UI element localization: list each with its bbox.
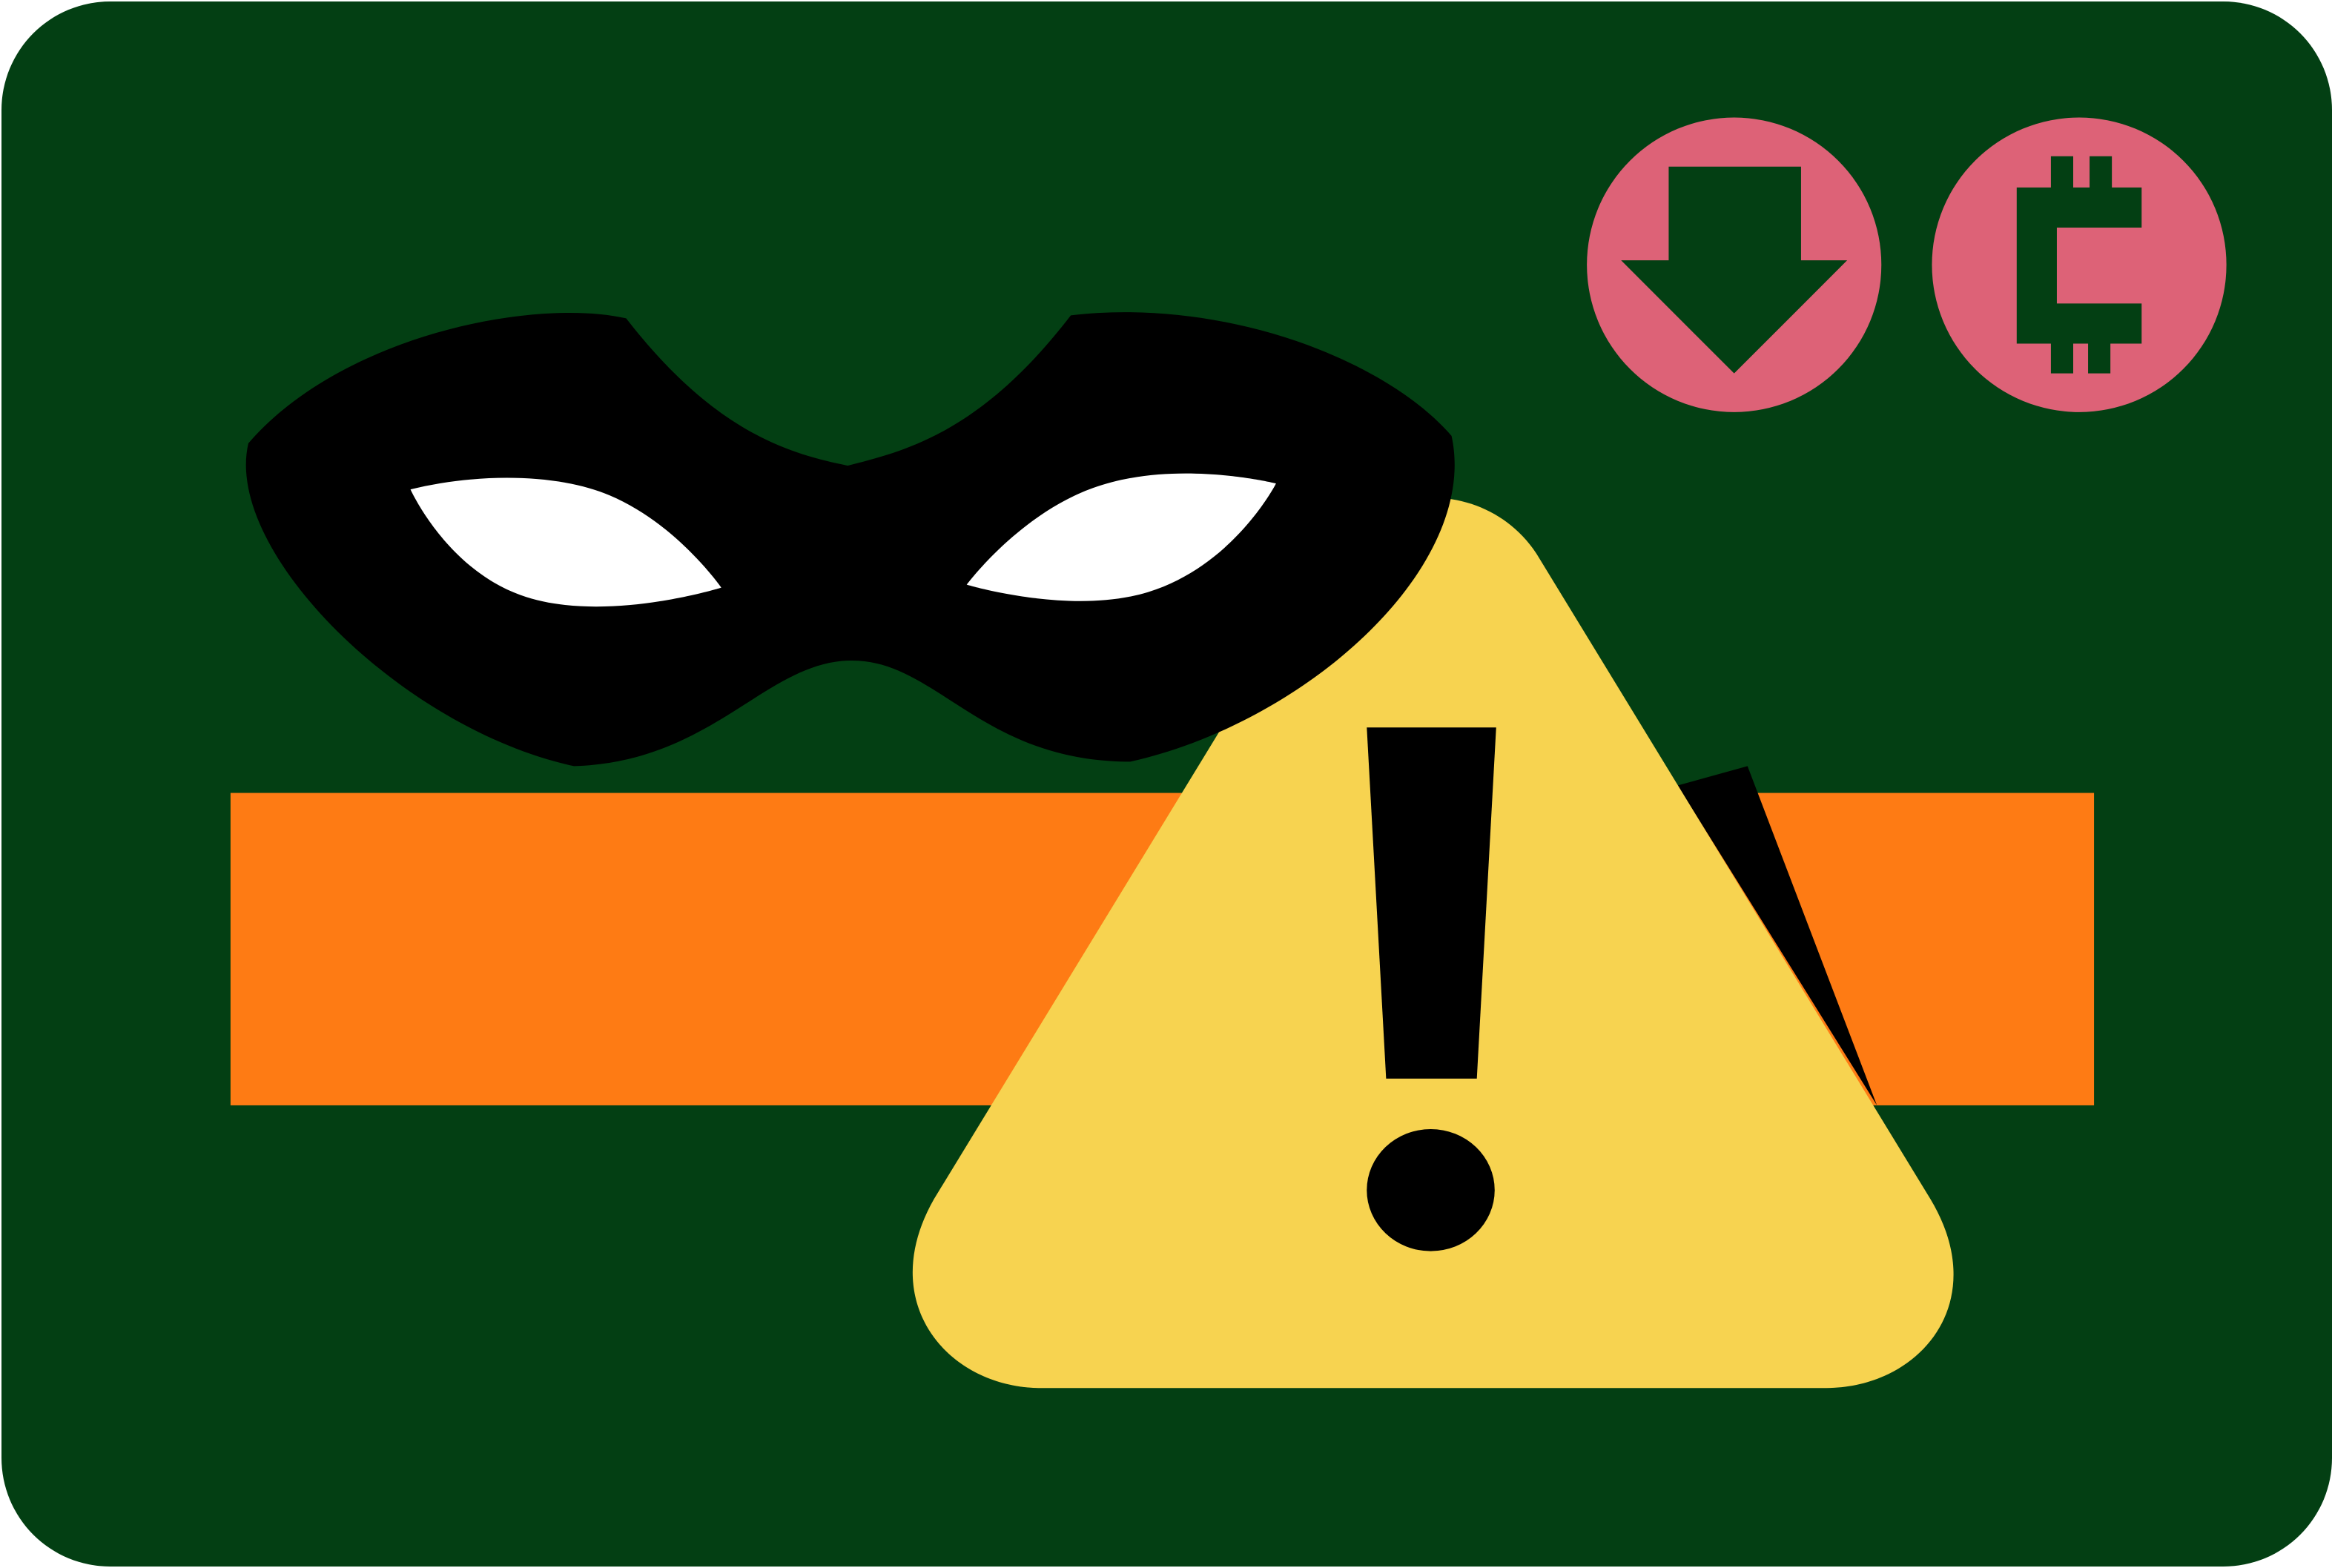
icon: coin circle bbox=[1932, 118, 2227, 412]
icon: download circle bbox=[1587, 118, 1881, 412]
icon: mask bbox=[246, 312, 1455, 766]
triangle shadow bbox=[1677, 766, 1877, 1105]
icon: warning triangle bbox=[913, 497, 1954, 1388]
orange bar bbox=[231, 793, 2094, 1105]
icon: exclamation mark bbox=[1367, 727, 1496, 1251]
